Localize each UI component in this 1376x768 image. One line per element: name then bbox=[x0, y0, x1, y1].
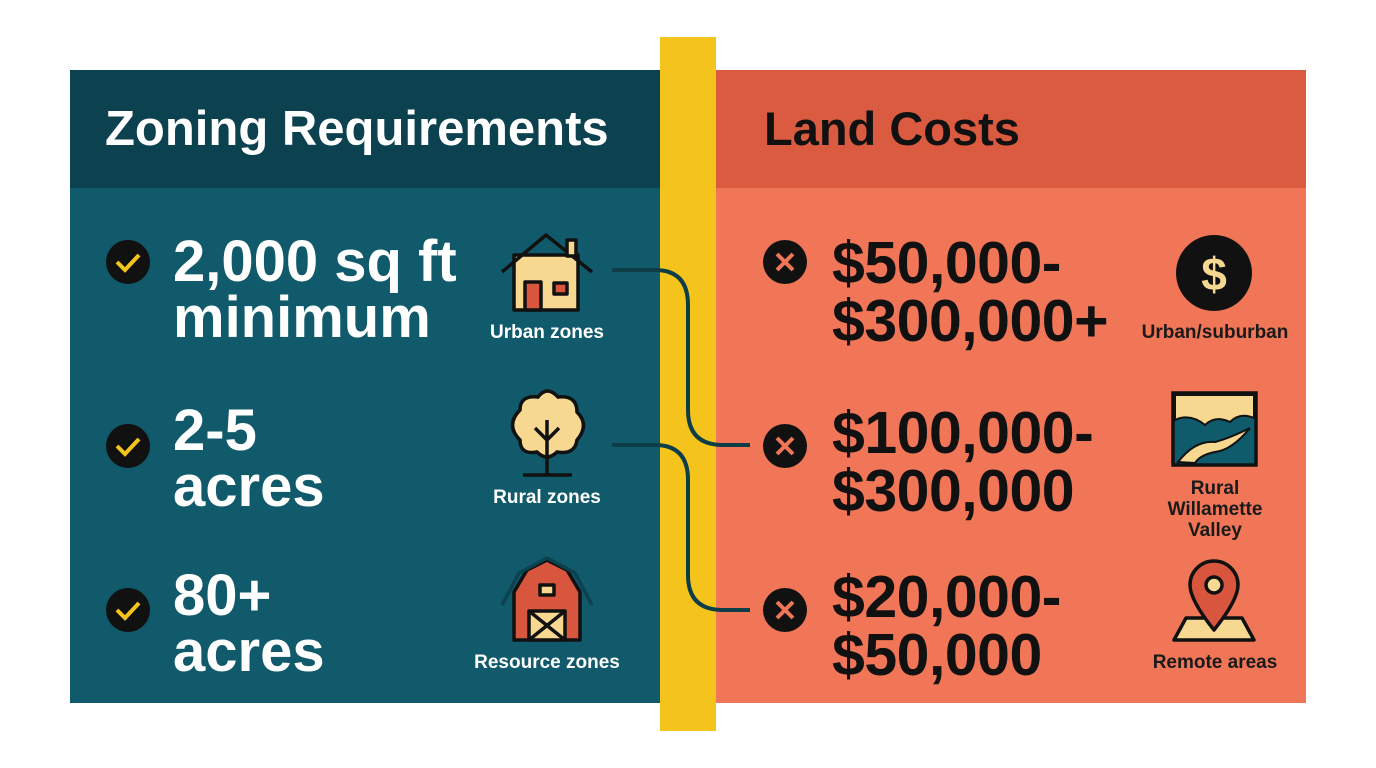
price: rural bbox=[832, 400, 1093, 524]
panel: zoning requirements bbox=[70, 70, 660, 703]
icon: dollar: $ bbox=[1201, 248, 1227, 300]
price: urban bbox=[832, 230, 1108, 354]
icon: check 2 bbox=[106, 424, 150, 468]
price: urban: $50,000- bbox=[832, 230, 1061, 296]
text: 80+ acres bbox=[173, 563, 325, 684]
text: 80+ acres: 80+ bbox=[173, 563, 271, 628]
icon: check 1 bbox=[106, 240, 150, 284]
heading: land costs: Land Costs bbox=[764, 102, 1020, 155]
panel: land costs bbox=[716, 70, 1306, 703]
label: remote areas: Remote areas bbox=[1153, 652, 1277, 673]
connector: rural to remote price bbox=[612, 445, 750, 610]
label: rural willamette valley: Willamette bbox=[1168, 499, 1262, 520]
text: 2-5 acres bbox=[173, 398, 325, 519]
label: rural zones: Rural zones bbox=[493, 487, 601, 508]
text: 2-5 acres: acres bbox=[173, 454, 325, 519]
price: remote bbox=[832, 564, 1061, 688]
icon: valley bbox=[1173, 393, 1256, 465]
connector: urban to rural price bbox=[612, 270, 750, 445]
text: 2,000 sq ft minimum bbox=[173, 229, 457, 350]
label: rural willamette valley: Valley bbox=[1188, 520, 1242, 541]
icon: barn bbox=[502, 558, 592, 640]
icon: dollar bbox=[1176, 235, 1252, 311]
text: 2-5 acres: 2-5 bbox=[173, 398, 257, 463]
label: resource zones: Resource zones bbox=[474, 652, 620, 673]
icon: tree bbox=[512, 391, 584, 475]
text: 80+ acres: acres bbox=[173, 619, 325, 684]
label: rural willamette valley: Rural bbox=[1191, 478, 1239, 499]
label: urban zones: Urban zones bbox=[490, 322, 604, 343]
icon: house bbox=[502, 235, 592, 310]
price: urban: $300,000+ bbox=[832, 288, 1108, 354]
icon: x 1 bbox=[763, 240, 807, 284]
icon: x 2 bbox=[763, 424, 807, 468]
price: rural: $100,000- bbox=[832, 400, 1093, 466]
icon: check 3 bbox=[106, 588, 150, 632]
price: remote: $50,000 bbox=[832, 622, 1042, 688]
label: rural willamette valley bbox=[1168, 478, 1262, 541]
label: urban/suburban: Urban/suburban bbox=[1142, 322, 1288, 343]
price: remote: $20,000- bbox=[832, 564, 1061, 630]
heading: zoning requirements bbox=[70, 70, 660, 188]
divider bar bbox=[660, 37, 716, 731]
heading: land costs bbox=[716, 70, 1306, 188]
icon: map pin bbox=[1174, 561, 1254, 640]
price: rural: $300,000 bbox=[832, 458, 1074, 524]
text: 2,000 sq ft minimum: 2,000 sq ft bbox=[173, 229, 457, 294]
text: 2,000 sq ft minimum: minimum bbox=[173, 285, 431, 350]
icon: x 3 bbox=[763, 588, 807, 632]
heading: zoning requirements: Zoning Requirements bbox=[105, 102, 609, 156]
